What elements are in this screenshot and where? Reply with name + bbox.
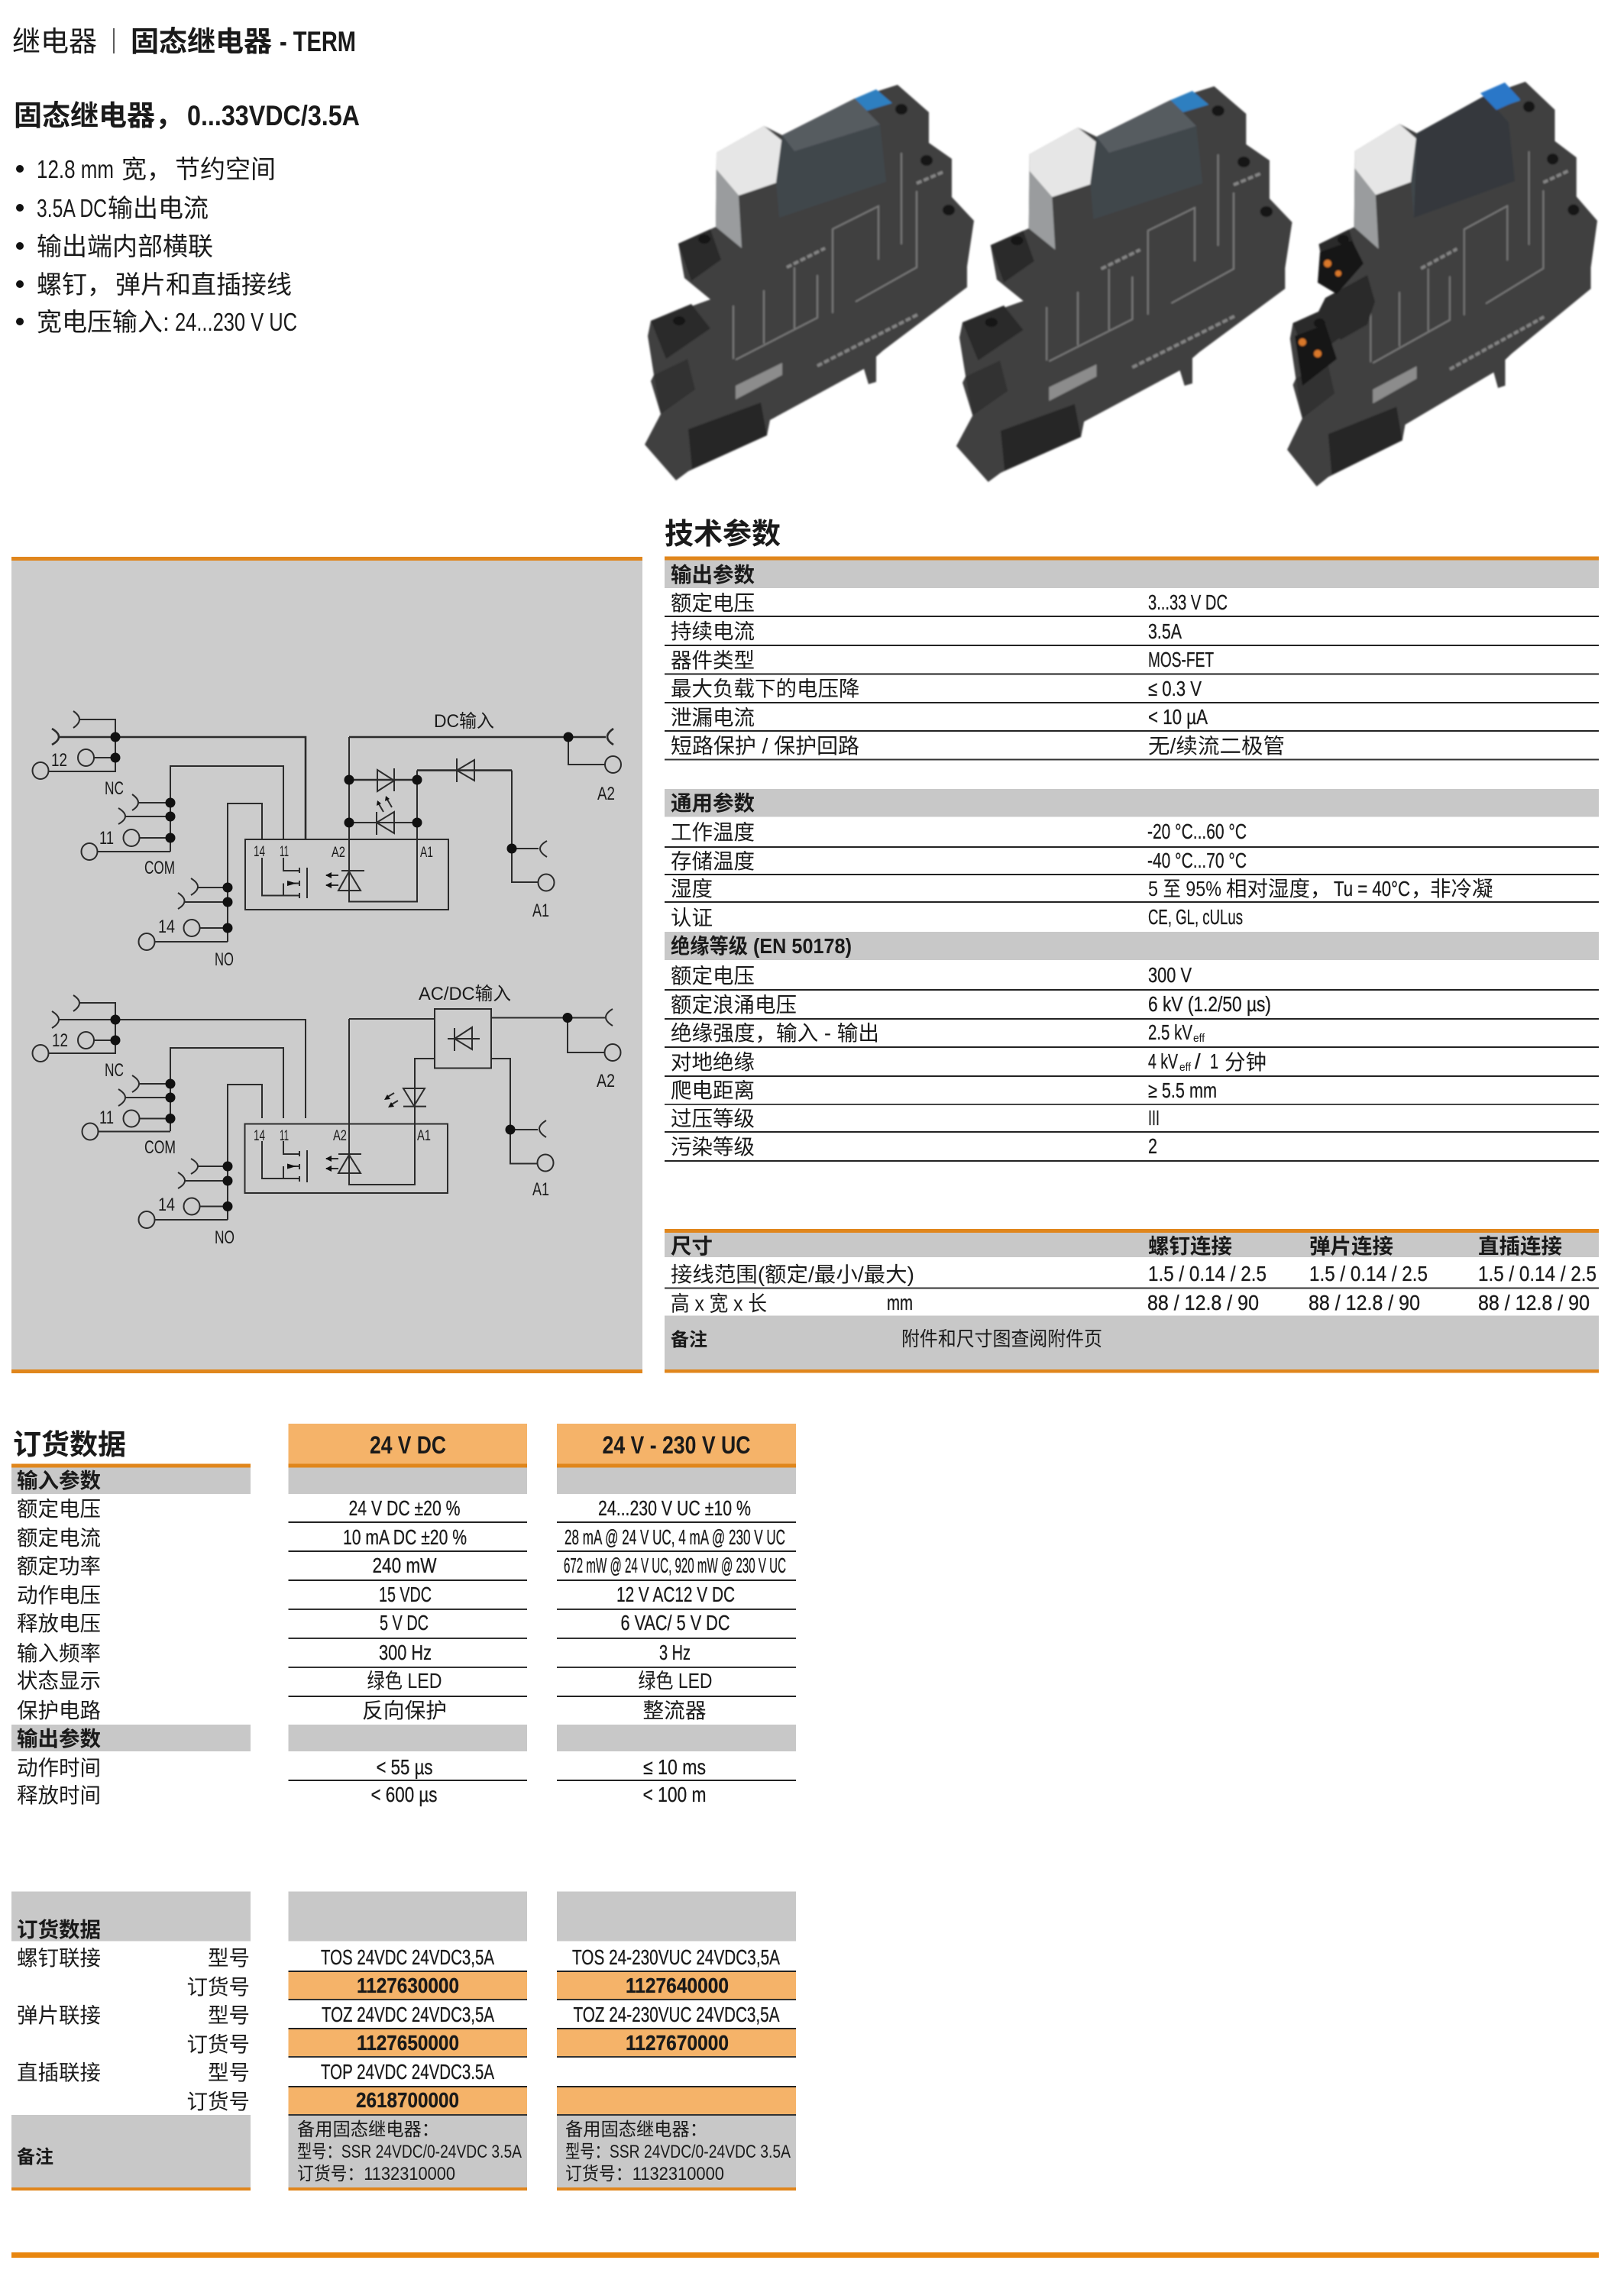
- row: input frequency: [17, 1641, 796, 1668]
- row: humidity: Tu = 40°C: [1334, 877, 1410, 900]
- row: insulation to ground: 分钟: [1224, 1050, 1267, 1074]
- row group: push-in connection: 订货号: [186, 2090, 250, 2113]
- row: status indicator: 状态显示: [17, 1669, 101, 1693]
- table: technical parameters: [665, 556, 1599, 1162]
- row: release time: < 100 m: [643, 1783, 706, 1806]
- relay module box: A2: [333, 1128, 347, 1144]
- COM terminals: [82, 1048, 283, 1158]
- product photo: screw relay: [645, 85, 974, 480]
- NC terminals: NC: [105, 1060, 124, 1081]
- row: rated power: 额定功率: [17, 1554, 101, 1578]
- row: input frequency: 3 Hz: [659, 1641, 691, 1664]
- row: humidity: 湿度: [671, 877, 713, 900]
- row: dielectric strength: [665, 1020, 1599, 1048]
- row: operate time: [17, 1755, 796, 1781]
- row: rated voltage: 300 V: [1148, 963, 1192, 987]
- NO terminals: [139, 803, 262, 970]
- row: device type: [665, 648, 1599, 675]
- row: pick-up voltage: 动作电压: [17, 1583, 101, 1607]
- row: humidity: 非冷凝: [1430, 877, 1493, 900]
- NO terminals: 14: [158, 1195, 175, 1215]
- feature list: 节约空间: [175, 155, 276, 183]
- notes row: 备用固态继电器：: [565, 2119, 707, 2140]
- feature list: [16, 155, 297, 336]
- relay module box: A1: [417, 1128, 431, 1144]
- row: pick-up voltage: 15 VDC: [379, 1583, 432, 1606]
- row: rated power: 240 mW: [373, 1554, 437, 1577]
- NO terminals: [139, 1085, 262, 1248]
- column header: 24 V DC: 24 V DC: [370, 1431, 446, 1459]
- section: output parameters: [11, 1725, 796, 1751]
- row: humidity: ，: [1411, 877, 1432, 900]
- breadcrumb title: [12, 26, 356, 57]
- row: creepage distance: 爬电距离: [671, 1078, 755, 1102]
- row: continuous current: 3.5A: [1148, 619, 1182, 643]
- input bridge and LED: [344, 711, 621, 921]
- row: insulation to ground: 4 kV: [1148, 1049, 1178, 1073]
- row group: screw connection: 型号: [208, 1946, 250, 1970]
- table: order numbers: [11, 1891, 796, 2191]
- header band: 订货数据: [17, 1918, 101, 1942]
- row: voltage drop: ≤ 0.3 V: [1148, 677, 1202, 700]
- row: wire range: 1.5 / 0.14 / 2.5: [1148, 1262, 1267, 1285]
- feature list: 宽电压输入:: [37, 308, 170, 336]
- row: wire range: 1.5 / 0.14 / 2.5: [1309, 1262, 1428, 1285]
- row: creepage distance: ≥ 5.5 mm: [1148, 1078, 1217, 1102]
- feature list: 宽，: [121, 155, 172, 183]
- relay module box: 11: [280, 844, 289, 860]
- row: rated voltage: [665, 590, 1599, 617]
- row group: screw connection: 1127630000: [357, 1974, 459, 1997]
- NC terminals: NC: [105, 778, 124, 799]
- row: dielectric strength: eff: [1193, 1032, 1205, 1045]
- dimensions header: [665, 1233, 1599, 1258]
- product heading: 固态继电器，: [14, 100, 183, 131]
- relay module box: 14: [254, 844, 265, 860]
- row: leakage current: [665, 705, 1599, 732]
- row: operating temperature: -20 °C...60 °C: [1147, 820, 1247, 843]
- row: rated voltage: 额定电压: [671, 964, 755, 988]
- row: storage temperature: -40 °C...70 °C: [1147, 849, 1247, 872]
- column header: 24 V DC: [289, 1424, 527, 1463]
- row: height width length: 88 / 12.8 / 90: [1478, 1291, 1590, 1314]
- row: insulation to ground: /: [1195, 1049, 1201, 1073]
- row: drop-out voltage: 5 V DC: [380, 1611, 429, 1634]
- row: insulation to ground: eff: [1179, 1061, 1192, 1074]
- notes row: 备注: [17, 2147, 53, 2168]
- row: operate time: < 55 µs: [376, 1755, 432, 1779]
- row: wire range: 接线范围(额定/最小/最大): [671, 1263, 914, 1286]
- row: wire range: 1.5 / 0.14 / 2.5: [1478, 1262, 1597, 1285]
- row: insulation to ground: 对地绝缘: [671, 1050, 755, 1074]
- row: protection circuit: 反向保护: [362, 1699, 447, 1722]
- NC terminals: [32, 995, 306, 1118]
- row: drop-out voltage: [17, 1611, 796, 1639]
- row: rated current: 额定电流: [17, 1526, 101, 1550]
- section: general parameters: 通用参数: [671, 791, 755, 815]
- notes row: 备用固态继电器：: [297, 2119, 439, 2140]
- row: short circuit protection: 无/续流二极管: [1148, 734, 1285, 758]
- row: voltage drop: [665, 677, 1599, 703]
- row: humidity: 相对湿度，: [1226, 877, 1331, 900]
- rectifier and LED: AC/DC输入: [419, 984, 511, 1004]
- row group: screw connection: [17, 1945, 796, 2000]
- product heading: 0...33VDC/3.5A: [187, 100, 360, 131]
- header band: [11, 1891, 796, 1942]
- section: input parameters: [11, 1463, 796, 1494]
- row: leakage current: < 10 µA: [1148, 705, 1208, 729]
- row: release time: [17, 1783, 706, 1807]
- row: certification: CE, GL, cULus: [1148, 905, 1243, 929]
- input bridge and LED: DC输入: [434, 711, 494, 732]
- section: output parameters: 输出参数: [17, 1727, 101, 1751]
- NO terminals: 14: [158, 917, 175, 937]
- section: output parameters: 输出参数: [671, 563, 755, 587]
- COM terminals: 11: [99, 1107, 114, 1128]
- row: device type: MOS-FET: [1148, 648, 1214, 671]
- row: surge voltage: 额定浪涌电压: [671, 993, 797, 1017]
- row: dielectric strength: 2.5 kV: [1148, 1020, 1192, 1044]
- row group: tension clamp connection: TOZ 24-230VUC 24VDC3,5A: [573, 2003, 780, 2026]
- row: continuous current: [665, 619, 1599, 646]
- row: certification: 认证: [671, 906, 713, 930]
- column header: 24 V - 230 V UC: 24 V - 230 V UC: [602, 1431, 750, 1459]
- heading: technical data: 技术参数: [665, 519, 781, 551]
- NO terminals: NO: [215, 1227, 235, 1248]
- row: rated voltage: [665, 963, 1599, 991]
- row group: tension clamp connection: 1127650000: [357, 2031, 459, 2055]
- row: rated power: [17, 1554, 796, 1581]
- row: pick-up voltage: 12 V AC12 V DC: [616, 1583, 735, 1606]
- input bridge and LED: A1: [532, 900, 549, 921]
- section: output parameters: [665, 561, 1599, 588]
- section: insulation coordination: [665, 932, 1599, 960]
- feature list: 输出端内部横联: [37, 232, 213, 260]
- row: leakage current: 泄漏电流: [671, 706, 755, 729]
- row group: push-in connection: TOP 24VDC 24VDC3.5A: [321, 2060, 494, 2084]
- row: protection circuit: 整流器: [643, 1699, 706, 1722]
- row: operate time: 动作时间: [17, 1756, 101, 1780]
- row: rated voltage: 额定电压: [17, 1497, 101, 1521]
- row group: push-in connection: [17, 2060, 796, 2115]
- row: wire range: [665, 1262, 1599, 1289]
- row group: screw connection: 订货号: [186, 1975, 250, 1999]
- product photo: push-in relay: [1287, 82, 1597, 487]
- row group: screw connection: 螺钉联接: [17, 1946, 101, 1970]
- row: rated current: [17, 1525, 796, 1552]
- row group: tension clamp connection: 型号: [208, 2003, 250, 2027]
- row: storage temperature: [665, 849, 1599, 875]
- row: dielectric strength: 绝缘强度，输入 - 输出: [671, 1021, 879, 1045]
- breadcrumb title: - TERM: [280, 26, 356, 57]
- note row: 备注: [671, 1330, 707, 1350]
- row group: push-in connection: 型号: [208, 2061, 250, 2084]
- row: pollution degree: 污染等级: [671, 1135, 755, 1159]
- dimensions header: 螺钉连接: [1148, 1234, 1232, 1258]
- section: input parameters: 输入参数: [17, 1469, 101, 1492]
- NO terminals: NO: [215, 949, 234, 970]
- relay module box: A2: [332, 845, 345, 861]
- circuit: AC/DC input: [32, 984, 620, 1248]
- row: input frequency: 输入频率: [17, 1641, 101, 1665]
- row: rated voltage: 额定电压: [671, 591, 755, 615]
- COM terminals: [81, 766, 283, 878]
- row: short circuit protection: 短路保护 / 保护回路: [671, 734, 859, 758]
- input bridge and LED: A2: [597, 784, 615, 804]
- row: rated voltage: [17, 1496, 796, 1523]
- rectifier and LED: [384, 984, 620, 1200]
- heading: ordering data: 订货数据: [13, 1429, 126, 1460]
- row: rated current: 28 mA @ 24 V UC, 4 mA @ 230 V UC: [565, 1525, 785, 1549]
- row: rated current: 10 mA DC ±20 %: [343, 1525, 467, 1549]
- row: rated voltage: 24 V DC ±20 %: [348, 1496, 460, 1520]
- feature list: 螺钉，: [37, 270, 112, 299]
- row: continuous current: 持续电流: [671, 619, 755, 643]
- row: height width length: 88 / 12.8 / 90: [1147, 1291, 1259, 1314]
- row: insulation to ground: [665, 1049, 1599, 1077]
- dimensions header: 直插连接: [1478, 1234, 1562, 1258]
- row group: tension clamp connection: 订货号: [186, 2032, 250, 2056]
- row: release time: < 600 µs: [371, 1783, 437, 1806]
- row: operating temperature: [665, 820, 1599, 848]
- row: certification: [671, 905, 1243, 930]
- row: humidity: [665, 877, 1599, 903]
- column header: 24 V - 230 V UC: [557, 1424, 796, 1463]
- relay module box: 11: [280, 1128, 289, 1144]
- dimensions header: 弹片连接: [1309, 1234, 1393, 1258]
- section: general parameters: [665, 789, 1599, 817]
- row: height width length: 88 / 12.8 / 90: [1309, 1291, 1420, 1314]
- NC terminals: [32, 711, 306, 839]
- row: surge voltage: [665, 992, 1599, 1020]
- row: rated power: 672 mW @ 24 V UC, 920 mW @ 230 V UC: [564, 1554, 786, 1577]
- relay module box: 14: [254, 1128, 265, 1144]
- row: input frequency: 300 Hz: [379, 1641, 432, 1664]
- NC terminals: 12: [52, 1030, 68, 1051]
- row: release time: 释放时间: [17, 1783, 101, 1807]
- row: status indicator: 绿色 LED: [367, 1669, 442, 1693]
- row: creepage distance: [665, 1078, 1599, 1105]
- circuit: DC input: [32, 711, 621, 970]
- COM terminals: COM: [144, 858, 175, 878]
- row: rated voltage: 24...230 V UC ±10 %: [598, 1496, 751, 1520]
- feature list: 输出电流: [108, 194, 209, 222]
- row: operate time: ≤ 10 ms: [643, 1755, 706, 1779]
- relay module box: [244, 1019, 448, 1193]
- row: pollution degree: 2: [1148, 1134, 1157, 1158]
- breadcrumb title: 固态继电器: [131, 26, 272, 57]
- row group: tension clamp connection: [17, 2003, 796, 2058]
- product photo: tension clamp relay: [956, 86, 1292, 482]
- row: surge voltage: 6 kV (1.2/50 µs): [1148, 992, 1271, 1016]
- row: overvoltage category: III: [1148, 1106, 1160, 1130]
- row: overvoltage category: [665, 1106, 1599, 1133]
- row group: screw connection: TOS 24VDC 24VDC3,5A: [321, 1945, 494, 1969]
- note row: [665, 1315, 1599, 1373]
- row: device type: 器件类型: [671, 648, 755, 672]
- note row: 附件和尺寸图查阅附件页: [901, 1327, 1102, 1350]
- product heading: [14, 100, 360, 131]
- relay module box: A1: [420, 845, 433, 861]
- COM terminals: 11: [99, 828, 114, 849]
- row: pick-up voltage: [17, 1583, 796, 1610]
- row: voltage drop: 最大负载下的电压降: [671, 677, 860, 700]
- notes row: [11, 2114, 796, 2191]
- NC terminals: 12: [51, 750, 67, 771]
- breadcrumb title: 继电器: [12, 26, 97, 57]
- row group: tension clamp connection: 弹片联接: [17, 2003, 101, 2027]
- feature list: 弹片和直插接线: [115, 270, 292, 299]
- feature list: 24...230 V UC: [175, 308, 297, 336]
- feature list: 3.5A DC: [37, 194, 107, 222]
- row: humidity: 5 至 95%: [1148, 877, 1221, 900]
- panel: wiring diagrams: [11, 557, 642, 1373]
- row: protection circuit: [17, 1699, 706, 1722]
- row group: tension clamp connection: TOZ 24VDC 24VDC3,5A: [322, 2003, 494, 2026]
- row: drop-out voltage: 6 VAC/ 5 V DC: [620, 1611, 730, 1634]
- COM terminals: COM: [144, 1137, 176, 1158]
- row: height width length: 高 x 宽 x 长: [671, 1292, 767, 1315]
- row: storage temperature: 存储温度: [671, 849, 755, 873]
- feature list: 12.8 mm: [37, 155, 114, 183]
- notes row: 订货号：1132310000: [297, 2164, 455, 2184]
- notes row: 型号：SSR 24VDC/0-24VDC 3.5A: [565, 2142, 791, 2162]
- row group: tension clamp connection: 1127670000: [626, 2031, 729, 2055]
- notes row: 订货号：1132310000: [565, 2164, 724, 2184]
- row: drop-out voltage: 释放电压: [17, 1612, 101, 1635]
- row: pollution degree: [665, 1134, 1599, 1162]
- footer rule: [11, 2252, 1599, 2258]
- row group: push-in connection: 直插联接: [17, 2061, 101, 2084]
- row: operating temperature: 工作温度: [671, 820, 755, 844]
- section: insulation coordination: 绝缘等级 (EN 50178): [671, 934, 852, 958]
- row: rated voltage: 3...33 V DC: [1148, 590, 1228, 614]
- row: status indicator: [17, 1669, 796, 1697]
- notes row: 型号：SSR 24VDC/0-24VDC 3.5A: [297, 2142, 522, 2162]
- row group: screw connection: TOS 24-230VUC 24VDC3,5A: [572, 1945, 780, 1969]
- dimensions header: 尺寸: [671, 1234, 713, 1258]
- relay module box: [245, 737, 448, 910]
- row: insulation to ground: 1: [1210, 1049, 1218, 1073]
- row group: push-in connection: 2618700000: [356, 2088, 459, 2112]
- row: height width length: mm: [887, 1291, 913, 1314]
- row group: screw connection: 1127640000: [626, 1974, 729, 1997]
- row: protection circuit: 保护电路: [17, 1699, 101, 1722]
- row: height width length: [671, 1291, 1590, 1315]
- table: dimensions: [665, 1229, 1599, 1373]
- rectifier and LED: A1: [532, 1179, 549, 1200]
- row: status indicator: 绿色 LED: [639, 1669, 712, 1693]
- rectifier and LED: A2: [597, 1071, 615, 1091]
- row: short circuit protection: [665, 734, 1599, 761]
- row: overvoltage category: 过压等级: [671, 1107, 755, 1130]
- table: ordering data parameters: [11, 1424, 796, 1807]
